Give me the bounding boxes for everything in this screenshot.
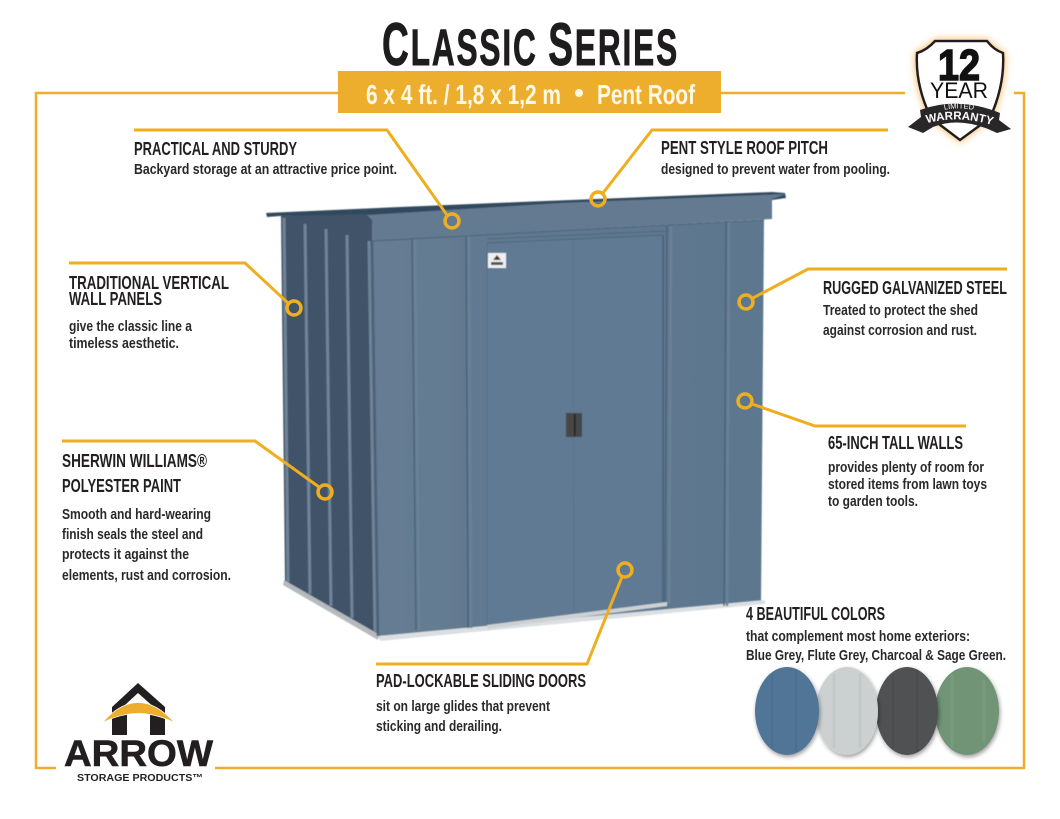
callout: sherwin williams paint: finish seals the steel and <box>62 526 203 543</box>
callout: traditional vertical wall panels: TRADITIONAL VERTICAL <box>69 273 229 293</box>
callout: traditional vertical wall panels <box>69 263 301 352</box>
icon: 12 year warranty badge: LIMITED <box>944 104 974 110</box>
callout: pent style roof pitch: PENT STYLE ROOF PITCH <box>661 138 828 158</box>
callout: practical and sturdy: Backyard storage at an attractive price point. <box>134 161 397 178</box>
callout: pad-lockable sliding doors: sticking and derailing. <box>376 718 502 735</box>
color swatches <box>755 667 999 755</box>
icon: 12 year warranty badge: YEAR <box>930 78 988 103</box>
callout: sherwin williams paint: elements, rust and corrosion. <box>62 567 231 584</box>
callout: pad-lockable sliding doors: PAD-LOCKABLE SLIDING DOORS <box>376 671 586 691</box>
shed sliding door <box>487 231 667 629</box>
callout: traditional vertical wall panels: give the classic line a <box>69 318 193 335</box>
shed floor base <box>283 580 765 641</box>
shed roof fascia <box>367 194 786 241</box>
callout: sherwin williams paint <box>62 441 332 584</box>
icon: 12 year warranty badge: 12 <box>938 41 980 90</box>
callout: traditional vertical wall panels: timeless aesthetic. <box>69 335 179 352</box>
callout: practical and sturdy: PRACTICAL AND STURDY <box>134 139 297 159</box>
logo: arrow storage products: ARROW <box>64 733 213 774</box>
swatch: sage green <box>935 667 999 755</box>
callout: rugged galvanized steel: against corrosion and rust. <box>823 322 977 339</box>
callout: pent style roof pitch: designed to prevent water from pooling. <box>661 161 890 178</box>
icon: 12 year warranty badge <box>908 33 1011 146</box>
swatch: blue grey <box>755 667 819 755</box>
subtitle banner: Pent Roof <box>597 79 695 110</box>
callout: 65-inch tall walls: provides plenty of room for <box>828 459 984 476</box>
title: CLASSIC SERIES <box>382 11 679 78</box>
logo: arrow storage products <box>64 683 213 784</box>
callout: pad-lockable sliding doors <box>376 563 632 735</box>
callout: practical and sturdy <box>134 130 459 228</box>
swatch: flute grey <box>816 667 878 755</box>
callout: sherwin williams paint: protects it against the <box>62 546 189 563</box>
logo: arrow storage products: STORAGE PRODUCTS™ <box>77 773 203 784</box>
callout: rugged galvanized steel: Treated to protect the shed <box>823 302 978 319</box>
shed door logo label <box>488 253 506 268</box>
shed roof top <box>266 192 786 217</box>
shed front panel lines <box>372 220 764 636</box>
shed door handle <box>566 413 582 437</box>
callout: 65-inch tall walls: stored items from lawn toys <box>828 476 987 493</box>
subtitle banner: 6 x 4 ft. / 1,8 x 1,2 m <box>366 79 561 110</box>
swatch: charcoal <box>876 667 938 755</box>
callout: sherwin williams paint: Smooth and hard-wearing <box>62 506 211 523</box>
callout: rugged galvanized steel <box>739 269 1007 339</box>
shed left wall ribs <box>284 218 375 632</box>
shed front wall <box>372 220 764 638</box>
text block: 4 beautiful colors <box>746 604 1006 664</box>
shed left wall <box>281 212 378 634</box>
callout: pad-lockable sliding doors: sit on large glides that prevent <box>376 698 550 715</box>
callout: sherwin williams paint: POLYESTER PAINT <box>62 476 181 496</box>
callout: 65-inch tall walls: to garden tools. <box>828 493 918 510</box>
text block: 4 beautiful colors: 4 BEAUTIFUL COLORS <box>746 604 885 624</box>
callout: 65-inch tall walls: 65-INCH TALL WALLS <box>828 433 963 453</box>
callout: 65-inch tall walls <box>738 394 987 510</box>
subtitle banner <box>338 71 721 113</box>
text block: 4 beautiful colors: that complement most home exteriors: <box>746 628 970 645</box>
callout: sherwin williams paint: SHERWIN WILLIAMS® <box>62 451 207 471</box>
callout: traditional vertical wall panels: WALL PANELS <box>69 289 162 309</box>
shed illustration <box>266 192 786 641</box>
callout: pent style roof pitch <box>591 130 890 206</box>
frame border <box>36 93 1024 768</box>
icon: 12 year warranty badge: WARRANTY <box>925 112 994 124</box>
